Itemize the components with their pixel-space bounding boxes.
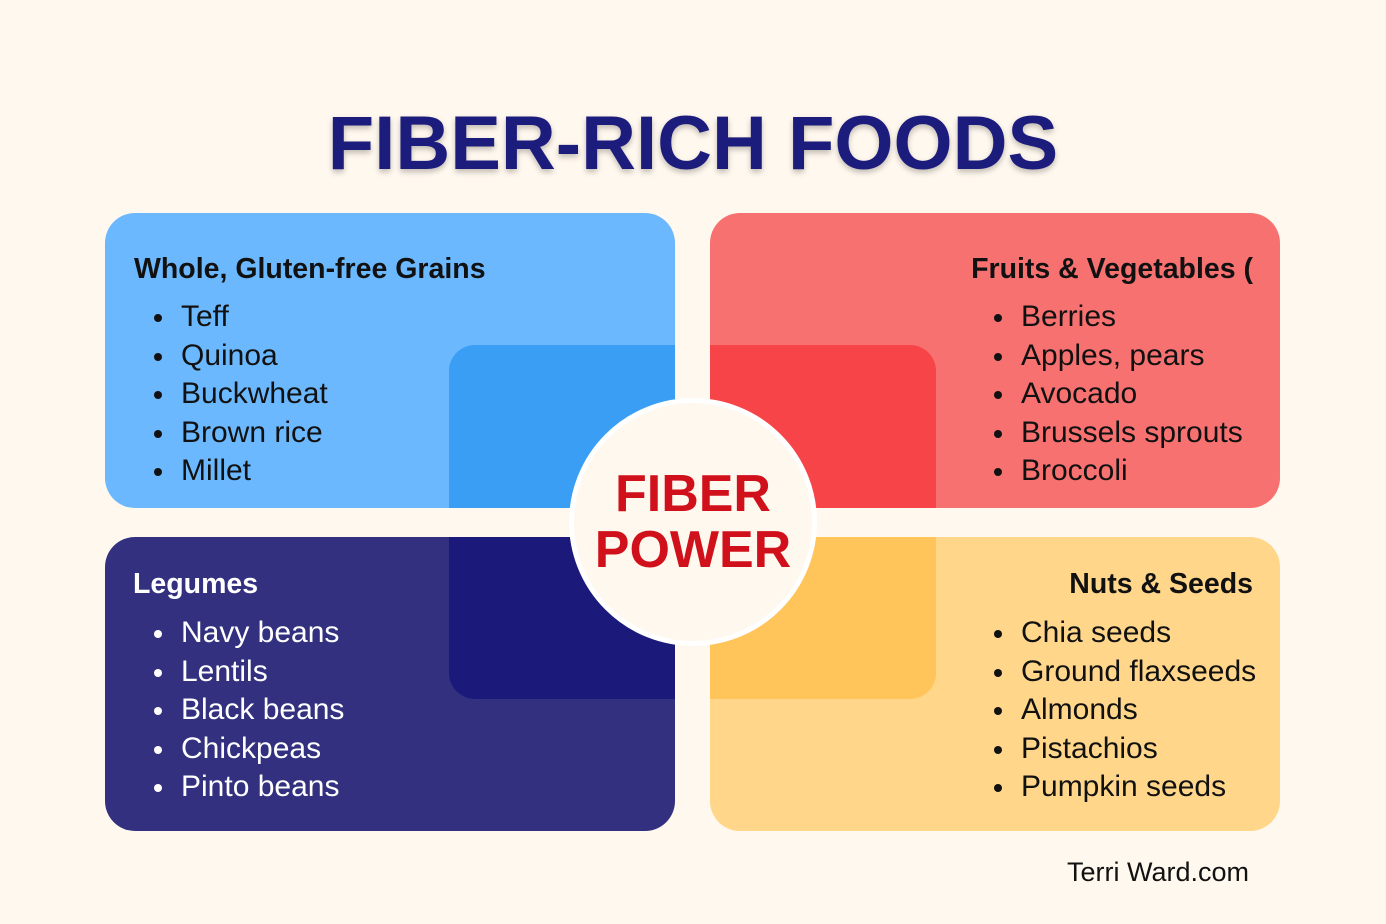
list: fruits <box>994 300 1243 487</box>
list: grains: Quinoa <box>181 338 278 372</box>
center circle <box>569 398 817 646</box>
list: nuts: Almonds <box>1021 693 1138 726</box>
list: legumes <box>154 616 344 803</box>
list: nuts: Pistachios <box>1021 732 1158 764</box>
list: fruits: Apples, pears <box>1021 338 1204 372</box>
list: legumes: Pinto beans <box>181 770 339 803</box>
list: grains <box>154 300 328 487</box>
list: fruits: Avocado <box>1021 377 1137 410</box>
list: grains: Teff <box>181 300 229 333</box>
list: legumes: Chickpeas <box>181 732 321 764</box>
panel: legumes <box>105 537 675 831</box>
list: nuts: Chia seeds <box>1021 616 1171 649</box>
list: legumes: Black beans <box>181 693 344 726</box>
panel: nuts <box>710 537 1280 831</box>
list: grains: Buckwheat <box>181 377 328 410</box>
list: legumes: Navy beans <box>181 616 339 649</box>
heading: fruits: Fruits & Vegetables ( <box>971 253 1253 285</box>
footer credit: Terri Ward.com <box>1067 857 1249 887</box>
center circle: POWER <box>595 521 791 579</box>
list: nuts: Ground flaxseeds <box>1021 654 1256 688</box>
list: nuts <box>994 616 1256 803</box>
list: legumes: Lentils <box>181 654 268 688</box>
heading: legumes: Legumes <box>133 568 258 600</box>
list: fruits: Berries <box>1021 300 1116 333</box>
list: fruits: Broccoli <box>1021 454 1128 487</box>
heading: grains: Whole, Gluten-free Grains <box>134 253 486 285</box>
list: grains: Millet <box>181 454 251 487</box>
center circle: FIBER <box>615 465 771 523</box>
heading: nuts: Nuts & Seeds <box>1069 568 1253 600</box>
panel: fruits <box>710 213 1280 508</box>
list: grains: Brown rice <box>181 416 323 448</box>
list: fruits: Brussels sprouts <box>1021 416 1243 448</box>
list: nuts: Pumpkin seeds <box>1021 770 1226 803</box>
panel: grains <box>105 213 675 508</box>
title: FIBER-RICH FOODS <box>328 101 1058 186</box>
